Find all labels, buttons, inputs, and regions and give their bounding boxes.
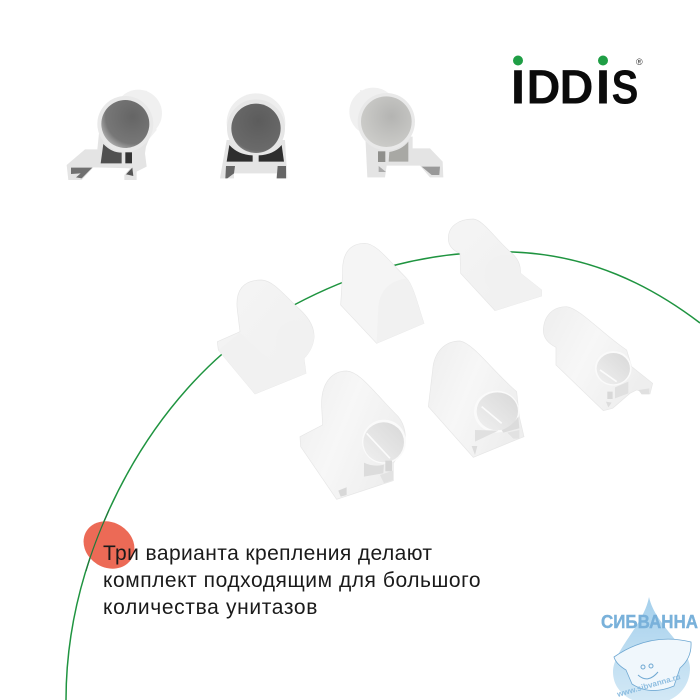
logo: IDDIS: I — [510, 62, 526, 114]
watermark: Сибванна logo — [601, 597, 698, 700]
red accent blob — [75, 512, 143, 578]
text block: комплект подходящим для большого — [103, 569, 481, 592]
watermark: face — [638, 664, 658, 679]
watermark: url: www.sibvanna.ru — [615, 672, 682, 699]
clip: back middle — [341, 243, 424, 343]
watermark: bathtub — [614, 639, 691, 691]
watermark: water drop — [613, 597, 690, 700]
profile 2 — [220, 93, 287, 178]
clip: back right — [448, 219, 542, 311]
logo: IDDIS: ® — [636, 57, 643, 67]
clip: front left — [300, 371, 406, 499]
text block: количества унитазов — [103, 596, 318, 619]
clip: back left — [217, 280, 314, 394]
profile 1 — [67, 90, 162, 180]
logo: IDDIS: I — [596, 62, 610, 114]
logo: IDDIS: S — [612, 62, 638, 114]
clip: right — [543, 307, 653, 411]
logo: IDDIS: D — [560, 62, 594, 114]
green arc over blob — [86, 510, 109, 571]
logo: IDDIS: D — [526, 62, 560, 114]
logo: IDDIS — [510, 56, 643, 114]
green arc — [66, 252, 700, 700]
profile 3 — [349, 88, 443, 177]
text block: Три варианта крепления делают — [103, 542, 432, 565]
clip: front middle — [428, 341, 524, 457]
